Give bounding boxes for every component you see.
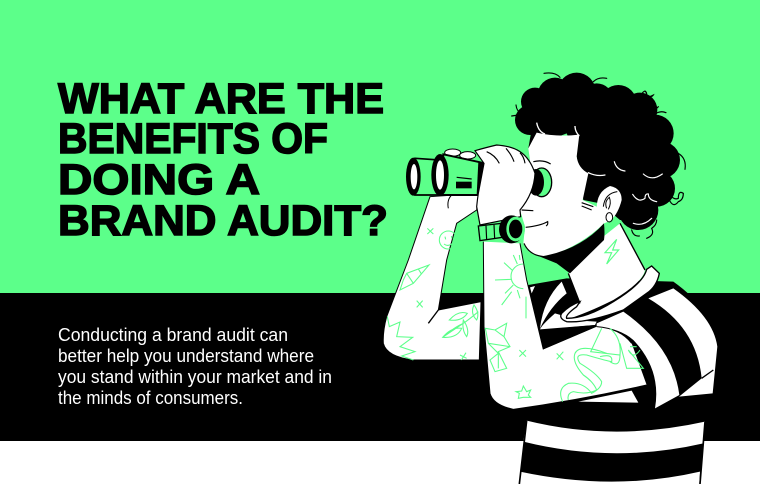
panel: black band [0, 293, 760, 441]
text block: intro paragraph: Conducting a brand audit can [58, 325, 288, 345]
panel: white footer [0, 441, 760, 484]
left arm tattoos [387, 228, 478, 360]
watch [478, 215, 525, 243]
illustration: person with binoculars [383, 73, 718, 484]
text block: intro paragraph: better help you understand where [58, 346, 314, 366]
title: BRAND AUDIT? [58, 197, 388, 245]
text block: intro paragraph: the minds of consumers. [58, 388, 243, 408]
ear with earring [597, 186, 622, 223]
face [520, 123, 604, 273]
title: DOING A [58, 156, 260, 204]
text block: intro paragraph [58, 325, 332, 408]
title: WHAT ARE THE [58, 75, 384, 123]
panel: green header background [0, 0, 760, 293]
left arm [383, 193, 481, 360]
icon: lightning tattoo [605, 239, 619, 264]
title [58, 75, 388, 245]
shirt [519, 278, 718, 484]
right arm tattoos [485, 255, 643, 402]
hand [475, 145, 535, 225]
title: BENEFITS OF [58, 115, 328, 163]
text block: intro paragraph: you stand within your market and in [58, 367, 332, 387]
right arm [483, 242, 647, 409]
binoculars [406, 149, 552, 197]
hair [512, 73, 685, 238]
neck [562, 223, 645, 320]
neck outline [568, 223, 645, 303]
collar [561, 266, 659, 322]
